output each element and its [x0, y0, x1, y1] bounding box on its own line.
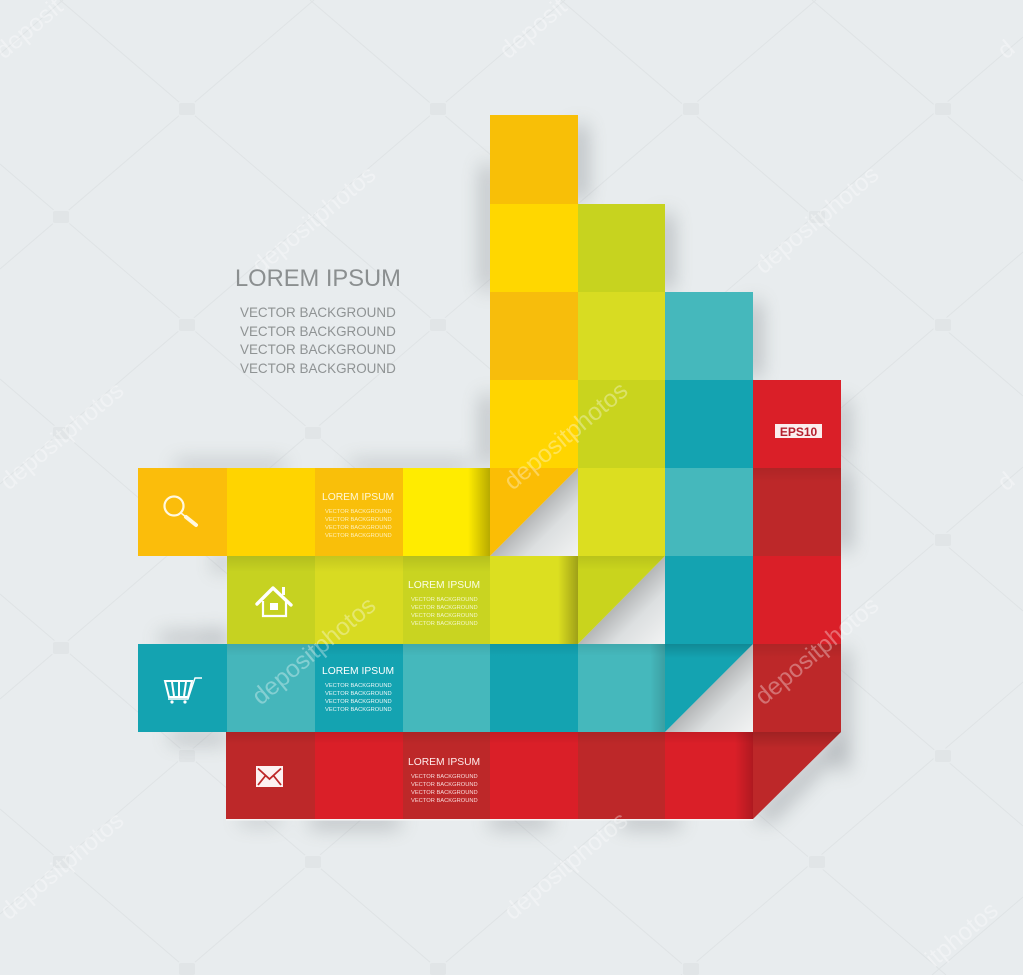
text block: vector background: VECTOR BACKGROUND	[240, 324, 396, 339]
clipped edge watermarks: d	[993, 467, 1020, 497]
depositphotos watermarks: depositphotos	[750, 592, 884, 711]
red row	[226, 732, 753, 820]
panel text: yellow: VECTOR BACKGROUND	[325, 517, 392, 523]
clipped edge watermarks: itphotos	[921, 897, 1004, 973]
text block: vector background	[240, 305, 396, 376]
panel text: lime: VECTOR BACKGROUND	[411, 605, 478, 611]
depositphotos watermarks: depositphotos	[750, 161, 884, 280]
panel text: teal: LOREM IPSUM	[322, 666, 394, 677]
depositphotos watermarks	[0, 161, 884, 926]
icon: envelope	[256, 766, 283, 787]
depositphotos watermarks: depositphotos	[247, 592, 381, 711]
text block: vector background: VECTOR BACKGROUND	[240, 361, 396, 376]
panel text: yellow: VECTOR BACKGROUND	[325, 533, 392, 539]
panel text: yellow: LOREM IPSUM	[322, 492, 394, 503]
panel text: lime: VECTOR BACKGROUND	[411, 621, 478, 627]
teal column	[665, 292, 753, 732]
panel text: red: VECTOR BACKGROUND	[411, 774, 478, 780]
panel text: teal: VECTOR BACKGROUND	[325, 707, 392, 713]
yellow strip	[138, 115, 578, 556]
lime row	[227, 556, 578, 644]
icon: house	[257, 587, 291, 616]
cast shadows	[160, 125, 850, 827]
fold openings	[490, 468, 753, 732]
yellow row	[138, 468, 490, 556]
red strip	[226, 380, 841, 820]
panel text: lime: VECTOR BACKGROUND	[411, 613, 478, 619]
heading: lorem ipsum: LOREM IPSUM	[235, 266, 401, 292]
depositphotos watermarks: depositphotos	[247, 161, 381, 280]
lime strip	[227, 204, 665, 644]
lime column	[578, 204, 665, 644]
panel text: teal: VECTOR BACKGROUND	[325, 699, 392, 705]
panel text: red: VECTOR BACKGROUND	[411, 782, 478, 788]
panel text: red: VECTOR BACKGROUND	[411, 790, 478, 796]
panel text: teal: VECTOR BACKGROUND	[325, 691, 392, 697]
panel text: teal: VECTOR BACKGROUND	[325, 683, 392, 689]
panel text: red: VECTOR BACKGROUND	[411, 798, 478, 804]
panel text: lime: VECTOR BACKGROUND	[411, 597, 478, 603]
panel text: yellow: VECTOR BACKGROUND	[325, 525, 392, 531]
panel text: red	[408, 757, 480, 804]
icon: shopping cart	[165, 678, 202, 704]
yellow column	[490, 115, 578, 556]
depositphotos watermarks: depositphotos	[499, 807, 633, 926]
panel text: lime	[408, 580, 480, 627]
clipped edge watermarks: d	[993, 35, 1020, 65]
camera watermark icons	[53, 103, 951, 975]
panel text: yellow: VECTOR BACKGROUND	[325, 509, 392, 515]
text block: vector background: VECTOR BACKGROUND	[240, 305, 396, 320]
text block: vector background: VECTOR BACKGROUND	[240, 342, 396, 357]
depositphotos watermarks: depositphotos	[499, 377, 633, 496]
panel text: red: LOREM IPSUM	[408, 757, 480, 768]
panel text: teal	[322, 666, 394, 713]
red column	[753, 380, 841, 819]
panel text: lime: LOREM IPSUM	[408, 580, 480, 591]
teal row	[138, 644, 665, 732]
label: EPS10: EPS10	[780, 425, 818, 439]
icon: magnifier	[164, 496, 196, 525]
panel text: yellow	[322, 492, 394, 539]
teal strip	[138, 292, 753, 732]
